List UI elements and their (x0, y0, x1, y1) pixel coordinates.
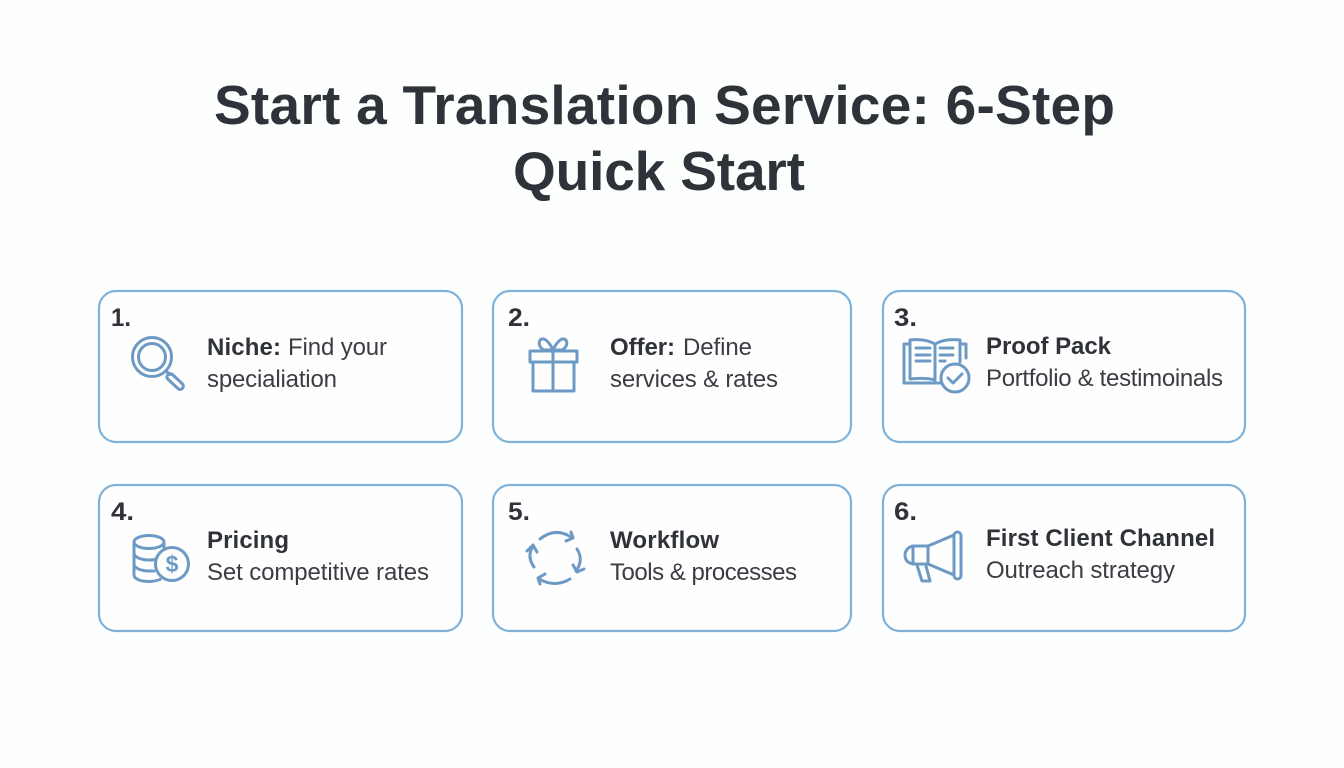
step 1 text (207, 334, 387, 393)
step 1 text: specialiation (207, 366, 337, 393)
step number 6: 6. (894, 498, 917, 526)
step 1 text: Find your (288, 334, 387, 361)
step 5 text (610, 527, 797, 586)
step 2 text: services & rates (610, 366, 778, 393)
step 2 text: Define (683, 334, 752, 361)
step number 5: 5. (508, 498, 530, 526)
icon: gift box (530, 339, 577, 391)
icon: book with check badge (904, 340, 969, 392)
icon: circular arrows (527, 532, 584, 584)
icon: coin stack with dollar (134, 536, 188, 582)
step 6 text (986, 525, 1215, 584)
step 5 text: Workflow (610, 527, 719, 554)
step 5 text: Tools & processes (610, 559, 797, 586)
title: Quick Start (513, 140, 805, 202)
step 6 text: Outreach strategy (986, 557, 1175, 584)
panel: step 1 niche (99, 291, 462, 442)
panel: step 2 offer (493, 291, 851, 442)
panel: step 3 proof pack (883, 291, 1245, 442)
step 4 text (207, 527, 429, 586)
title: Start a Translation Service: 6-Step (214, 74, 1115, 136)
step 3 text: Proof Pack (986, 333, 1112, 360)
step number 3: 3. (894, 304, 917, 332)
step 2 text: Offer: (610, 334, 675, 361)
icon: megaphone (905, 532, 961, 581)
step 2 text (610, 334, 778, 393)
icon: magnifying glass (132, 338, 185, 391)
step number 4: 4. (111, 498, 134, 526)
step 6 text: First Client Channel (986, 525, 1215, 552)
step 3 text (986, 333, 1223, 392)
step number 1: 1. (111, 304, 131, 332)
step 4 text: Pricing (207, 527, 289, 554)
step number 2: 2. (508, 304, 530, 332)
panel: step 5 workflow (493, 485, 851, 631)
icon: coin stack with dollar: $ (166, 551, 179, 577)
panel: step 4 pricing (99, 485, 462, 631)
title (214, 74, 1115, 202)
panel: step 6 first client channel (883, 485, 1245, 631)
step 3 text: Portfolio & testimoinals (986, 365, 1223, 392)
step 1 text: Niche: (207, 334, 281, 361)
step 4 text: Set competitive rates (207, 559, 429, 586)
